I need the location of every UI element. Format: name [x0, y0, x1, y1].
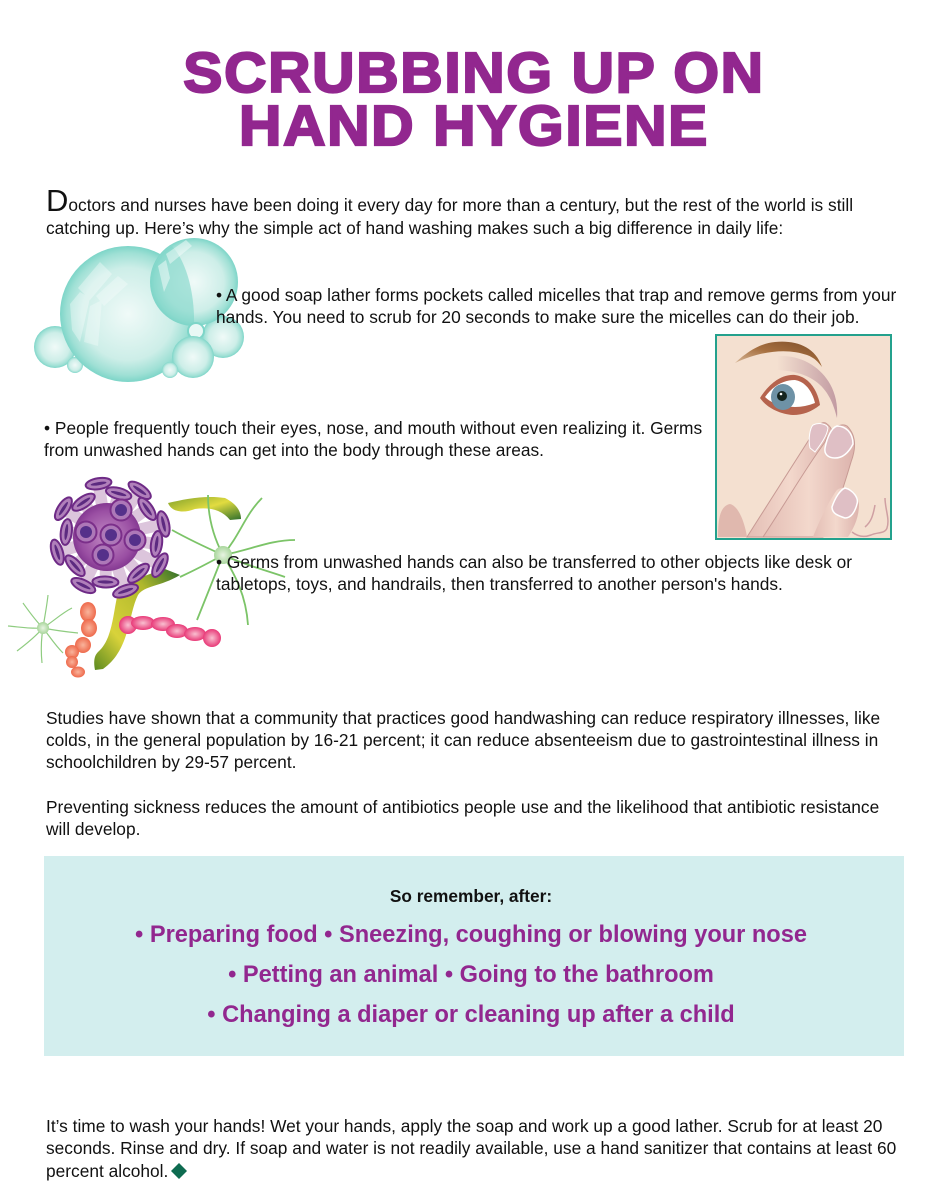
title: SCRUBBING UP ON: [183, 41, 765, 105]
bacteria: green rods: [94, 497, 241, 670]
icon: end diamond: [171, 1163, 187, 1179]
paragraph: studies: colds, in the general population by 16-21 percent; it can reduce absenteeism due to gastrointestinal illness in: [46, 730, 878, 750]
bullet: soap lather: [216, 285, 896, 327]
illustration: soap bubbles: [34, 238, 244, 382]
closing paragraph: It’s time to wash your hands! Wet your hands, apply the soap and work up a good lather. Scrub for at least 20: [46, 1116, 882, 1136]
reminder heading: So remember, after:: [390, 886, 552, 906]
paragraph: antibiotics: Preventing sickness reduces the amount of antibiotics people use and the likelihood that antibiotic resistance: [46, 797, 879, 817]
bullet: touching face: [44, 418, 702, 460]
intro paragraph: [46, 183, 853, 238]
bacteria: pink chain: [119, 616, 221, 647]
paragraph: studies: schoolchildren by 29-57 percent.: [46, 752, 296, 772]
reminder list: • Petting an animal • Going to the bathroom: [228, 962, 714, 988]
closing paragraph: percent alcohol.: [46, 1161, 168, 1181]
reminder list: [135, 922, 807, 1028]
bullet: soap lather: hands. You need to scrub for 20 seconds to make sure the micelles can do their job.: [216, 307, 859, 327]
title: HAND HYGIENE: [239, 94, 709, 158]
bullet: transferred germs: • Germs from unwashed hands can also be transferred to other objects like desk or: [216, 552, 852, 572]
closing paragraph: [46, 1116, 896, 1181]
virus: [48, 476, 172, 600]
germ: small green star: [8, 595, 78, 663]
panel: reminder: [44, 856, 904, 1056]
bullet: touching face: • People frequently touch their eyes, nose, and mouth without even realizing it. Germs: [44, 418, 702, 438]
reminder list: • Changing a diaper or cleaning up after a child: [207, 1002, 735, 1028]
bullet: transferred germs: tabletops, toys, and handrails, then transferred to another person's hands.: [216, 574, 783, 594]
paragraph: antibiotics: will develop.: [46, 819, 140, 839]
intro paragraph: Doctors and nurses have been doing it every day for more than a century, but the rest of the world is still: [46, 183, 853, 218]
bacteria: orange chain: [65, 602, 97, 678]
reminder list: • Preparing food • Sneezing, coughing or blowing your nose: [135, 922, 807, 948]
bullet: soap lather: • A good soap lather forms pockets called micelles that trap and remove germs from your: [216, 285, 896, 305]
title: [183, 41, 765, 158]
paragraph: studies: Studies have shown that a community that practices good handwashing can reduce respiratory illnesses, like: [46, 708, 880, 728]
bullet: touching face: from unwashed hands can get into the body through these areas.: [44, 440, 544, 460]
germ: large green star: [172, 495, 295, 625]
illustration: germs: [8, 476, 295, 678]
illustration: finger touching eye: [715, 334, 892, 540]
bullet: transferred germs: [216, 552, 852, 594]
paragraph: antibiotics: [46, 797, 879, 839]
closing paragraph: seconds. Rinse and dry. If soap and water is not readily available, use a hand sanitizer that contains at least 60: [46, 1138, 896, 1158]
paragraph: studies: [46, 708, 880, 772]
intro paragraph: catching up. Here’s why the simple act of hand washing makes such a big difference in daily life:: [46, 218, 783, 238]
